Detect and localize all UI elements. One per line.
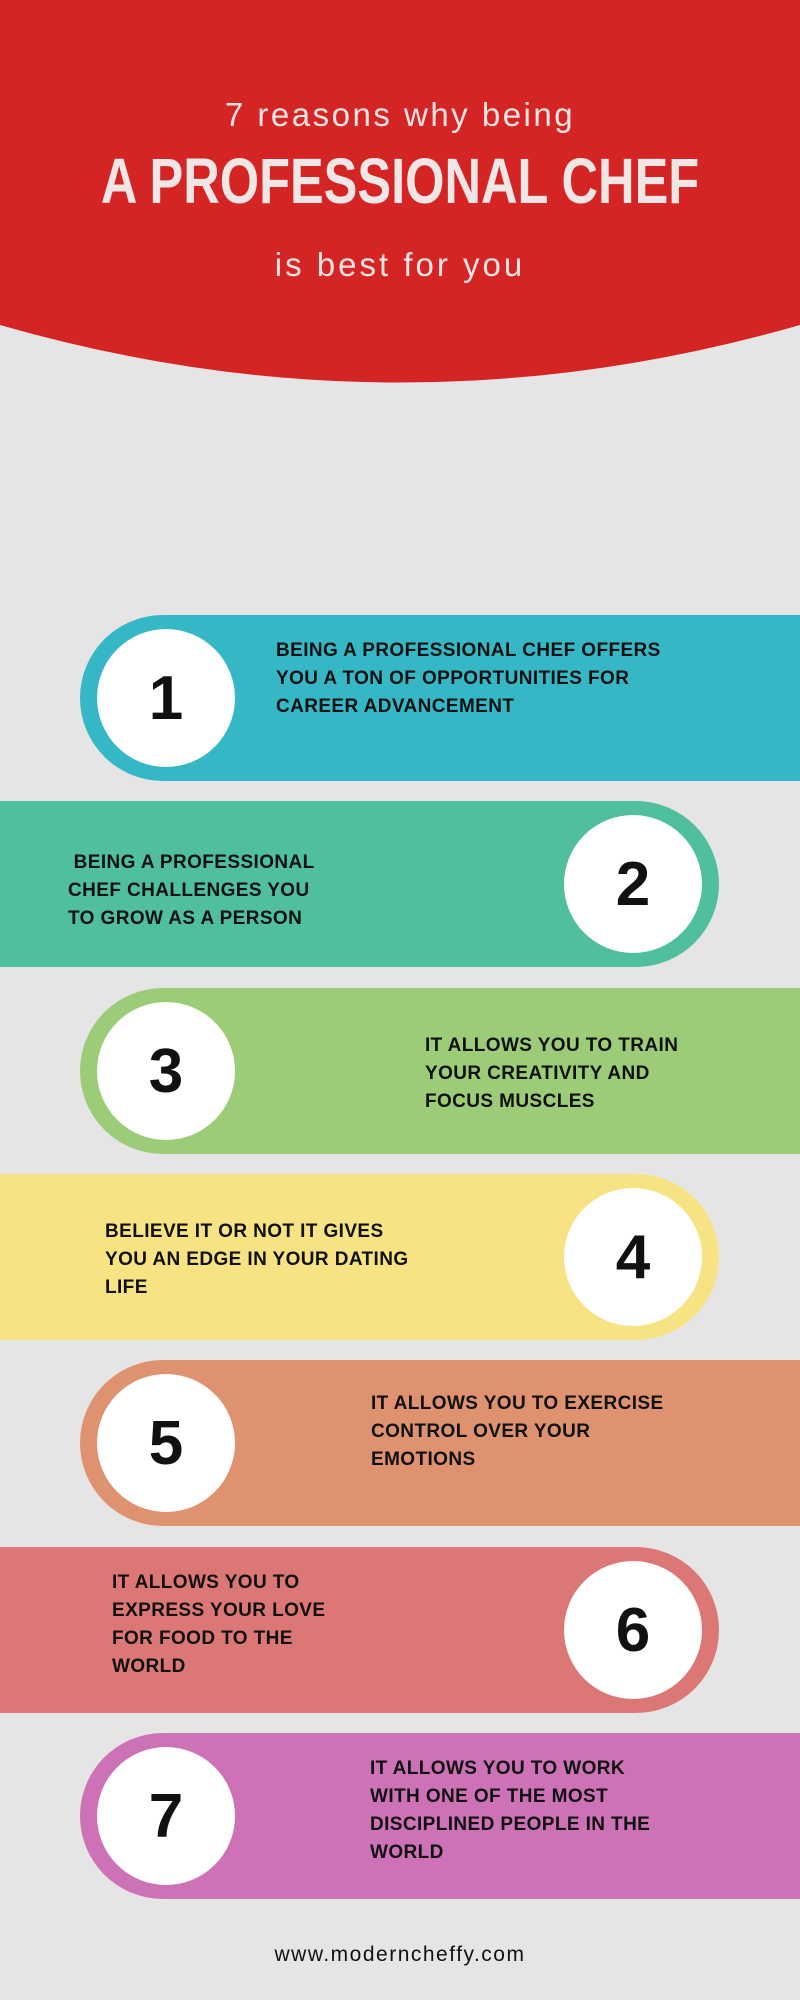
header [0,0,800,382]
item 1: 1 [149,664,183,732]
item 4: 4 [616,1222,650,1292]
item 6: EXPRESS YOUR LOVE [112,1600,325,1621]
item 7: DISCIPLINED PEOPLE IN THE [370,1814,650,1835]
item 6 [0,1547,719,1713]
item 3: YOUR CREATIVITY AND [425,1063,650,1084]
footer url: www.moderncheffy.com [274,1943,525,1966]
item 7: WORLD [370,1842,444,1863]
item 6: FOR FOOD TO THE [112,1628,293,1649]
item 5: EMOTIONS [371,1449,476,1470]
item 4: LIFE [105,1277,148,1298]
item 4: BELIEVE IT OR NOT IT GIVES [105,1221,384,1242]
item 1 [80,615,800,781]
item 3: 3 [149,1036,183,1106]
item 5 [80,1360,800,1526]
item 4 [0,1174,719,1340]
item 6: 6 [616,1596,650,1664]
item 1: YOU A TON OF OPPORTUNITIES FOR [276,668,629,689]
item 2: 2 [616,850,650,918]
item 6: IT ALLOWS YOU TO [112,1572,300,1593]
item 2: TO GROW AS A PERSON [68,908,302,929]
item 5: IT ALLOWS YOU TO EXERCISE [371,1393,664,1414]
item 2 [0,801,719,967]
item 6: WORLD [112,1656,186,1677]
item 7: IT ALLOWS YOU TO WORK [370,1758,625,1779]
item 1: CAREER ADVANCEMENT [276,696,514,717]
item 5: 5 [149,1408,183,1478]
subtitle bottom: is best for you [275,246,525,283]
item 3: FOCUS MUSCLES [425,1091,595,1112]
item 7 [80,1733,800,1899]
item 5: CONTROL OVER YOUR [371,1421,590,1442]
item 3 [80,988,800,1154]
item 1: BEING A PROFESSIONAL CHEF OFFERS [276,640,661,661]
item 2: BEING A PROFESSIONAL [74,852,315,873]
item 7: 7 [149,1782,183,1850]
item 4: YOU AN EDGE IN YOUR DATING [105,1249,409,1270]
title: A PROFESSIONAL CHEF [101,145,699,217]
item 2: CHEF CHALLENGES YOU [68,880,310,901]
subtitle top: 7 reasons why being [225,96,575,133]
item 3: IT ALLOWS YOU TO TRAIN [425,1035,678,1056]
item 7: WITH ONE OF THE MOST [370,1786,608,1807]
